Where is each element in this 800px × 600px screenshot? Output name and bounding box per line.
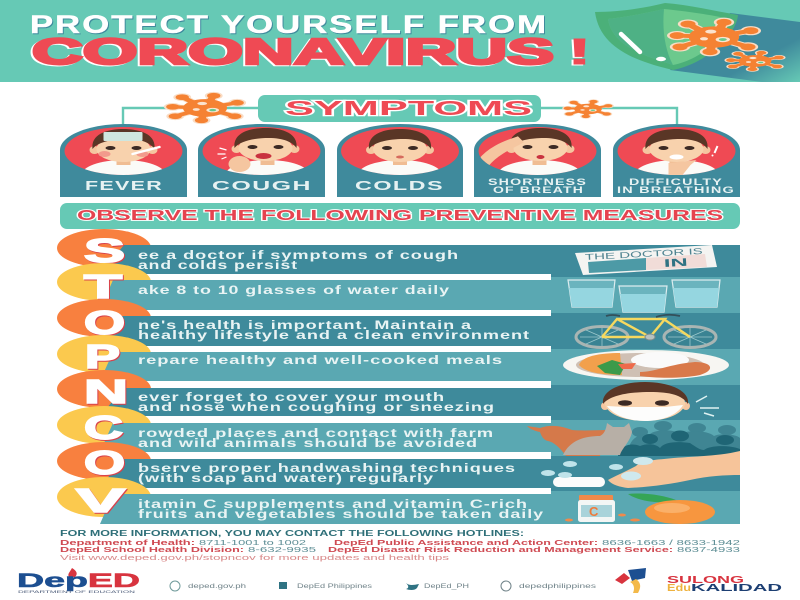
logo: Sulong EduKalidad: Edu [667, 583, 691, 594]
step C: C [84, 409, 123, 446]
step N: and nose when coughing or sneezing [138, 402, 495, 414]
social: facebook [279, 582, 372, 590]
icon: large virus [673, 20, 755, 54]
panel: shortness of breath [474, 124, 601, 197]
step C: rowded places and contact with farm [138, 428, 494, 440]
hotline information: Visit www.deped.gov.ph/stopncov for more updates and health tips [60, 553, 449, 562]
shield shadow [670, 13, 800, 82]
icon: doctor sign [575, 245, 717, 275]
panel: colds: COLDS [355, 178, 444, 193]
preventive measures heading: OBSERVE THE FOLLOWING PREVENTIVE MEASURES [77, 207, 723, 224]
panel: difficulty in breathing: DIFFICULTY [629, 177, 723, 188]
step O: bserve proper handwashing techniques [138, 463, 516, 475]
hotline information: 8636-1663 / 8633-1942 [602, 538, 740, 547]
panel: difficulty in breathing: IN BREATHING [617, 185, 735, 196]
exclamation mark: ! [568, 31, 591, 72]
panel: cough [198, 124, 325, 197]
panel: fever: FEVER [85, 178, 163, 193]
hotline information [60, 529, 740, 562]
social: twitter: DepEd_PH [424, 584, 469, 590]
social: instagram [501, 581, 596, 591]
icon: vitamin bottle: C [589, 504, 599, 519]
step V: fruits and vegetables should be taken daily [138, 509, 544, 521]
social: website [170, 581, 246, 591]
panel: cough: COUGH [212, 178, 312, 193]
social: instagram: depedphilippines [519, 584, 596, 590]
title line 1: PROTECT YOURSELF FROM [30, 11, 548, 39]
icon: animals and crowd [527, 421, 740, 456]
panel: shortness of breath: OF BREATH [493, 185, 584, 196]
hotline information: Department of Health: [60, 538, 195, 547]
icon: virus left [169, 94, 241, 122]
title line 2: CORONAVIRUS [32, 31, 554, 72]
header banner [0, 0, 800, 82]
icon: glasses of water [568, 280, 720, 312]
step P: repare healthy and well-cooked meals [138, 355, 503, 367]
logo: Sulong EduKalidad: SULONG [667, 575, 744, 586]
panel: colds [337, 124, 463, 197]
logo: DepEd: DEPARTMENT OF EDUCATION [18, 589, 135, 594]
social: website: deped.gov.ph [188, 584, 246, 590]
step V: itamin C supplements and vitamin C-rich [138, 499, 528, 511]
panel: fever [60, 124, 187, 197]
step O: O [84, 444, 125, 481]
step T: T [84, 268, 122, 305]
icon: orange fruit [628, 493, 715, 524]
logo: Sulong EduKalidad: KALIDAD [691, 583, 782, 594]
step C [57, 406, 740, 456]
step N: N [84, 373, 128, 410]
step T: ake 8 to 10 glasses of water daily [138, 285, 450, 297]
icon: child with face mask [601, 382, 719, 421]
hotline information: 8637-4933 [677, 545, 740, 554]
step V [57, 477, 740, 524]
logo: DepEd [17, 568, 140, 594]
symptoms heading: SYMPTOMS [285, 98, 532, 120]
step O: ne's health is important. Maintain a [138, 320, 472, 332]
step O: O [84, 304, 125, 341]
icon: virus right [566, 101, 610, 117]
logo: Sulong EduKalidad [615, 568, 782, 594]
symptoms heading [258, 95, 541, 122]
icon: plate of food [563, 350, 729, 380]
step S: and colds persist [138, 260, 298, 272]
step O: healthy lifestyle and a clean environment [138, 330, 530, 342]
step V: V [76, 482, 125, 519]
social: facebook: DepEd Philippines [297, 584, 372, 590]
step O [57, 442, 740, 491]
step T [57, 263, 740, 313]
hotline information: DepEd Disaster Risk Reduction and Management Service: [328, 545, 673, 554]
step S [57, 229, 740, 277]
social: twitter [406, 583, 469, 590]
panel: shortness of breath: SHORTNESS [488, 177, 587, 188]
logo: DepEd: Dep ED [17, 571, 140, 592]
step P [57, 335, 740, 385]
step N: ever forget to cover your mouth [138, 392, 445, 404]
step C: and wild animals should be avoided [138, 438, 478, 450]
icon: doctor sign: THE DOCTOR IS [585, 246, 704, 262]
hotline information: 8711-1001 to 1002 [199, 538, 306, 547]
hotline information: DepEd Public Assistance and Action Center: [334, 538, 598, 547]
icon: doctor sign: IN [664, 257, 688, 270]
step S: ee a doctor if symptoms of cough [138, 250, 459, 262]
icon: small virus [728, 52, 782, 70]
panel: difficulty in breathing [613, 124, 740, 197]
hotline information: FOR MORE INFORMATION, YOU MAY CONTACT THE FOLLOWING HOTLINES: [60, 529, 524, 538]
step S: S [84, 232, 125, 269]
icon: hand washing [541, 451, 740, 488]
icon: vitamin bottle [565, 495, 640, 522]
step P: P [85, 338, 120, 375]
icon: shield [595, 3, 738, 70]
step O [57, 299, 740, 349]
icon: bicycle [576, 315, 716, 348]
preventive measures heading [60, 203, 740, 229]
hotline information: DepEd School Health Division: [60, 545, 244, 554]
connector lines [123, 108, 677, 124]
step O: (with soap and water) regularly [138, 473, 434, 485]
step N [57, 370, 740, 420]
hotline information: 8-632-9935 [248, 545, 316, 554]
